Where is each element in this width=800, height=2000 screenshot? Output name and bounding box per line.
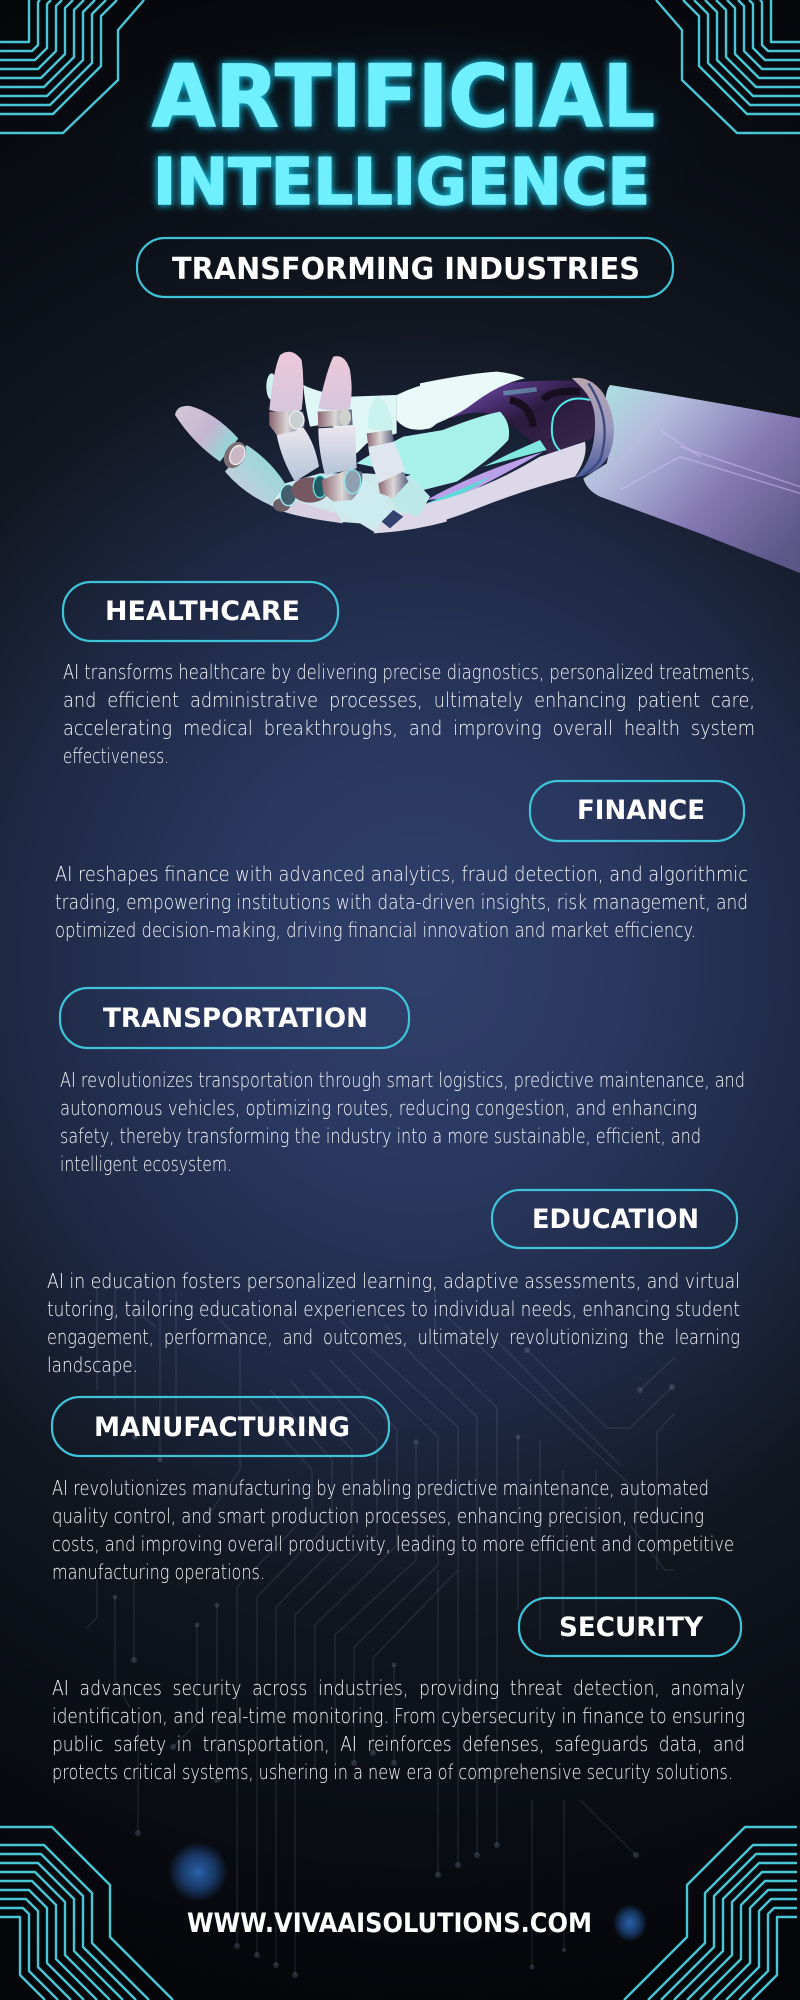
circuit corner: bottom left bbox=[0, 1827, 173, 2000]
title: ARTIFICIAL bbox=[152, 47, 655, 147]
section: finance bbox=[55, 781, 748, 942]
text: education: landscape. bbox=[47, 1353, 138, 1377]
text: manufacturing bbox=[52, 1476, 734, 1584]
finger one joint bbox=[219, 438, 251, 472]
finger two tip bbox=[269, 352, 303, 412]
text: security bbox=[52, 1676, 745, 1784]
forearm light streaks bbox=[620, 430, 800, 493]
subtitle pill: TRANSFORMING INDUSTRIES bbox=[172, 252, 640, 287]
section: healthcare bbox=[63, 582, 755, 768]
finger three segment bbox=[318, 426, 357, 475]
palm bottom bbox=[373, 508, 447, 533]
back of hand bbox=[420, 372, 525, 430]
knuckle two bbox=[292, 476, 328, 503]
section: security bbox=[52, 1598, 745, 1784]
text: transportation: intelligent ecosystem. bbox=[60, 1152, 232, 1176]
pill: healthcare bbox=[63, 582, 338, 641]
finger one segment bbox=[225, 445, 285, 505]
knuckle three bbox=[322, 470, 362, 502]
wrist tube bbox=[450, 381, 595, 455]
purple swoosh bbox=[427, 452, 543, 500]
pill: security: SECURITY bbox=[559, 1612, 703, 1643]
pill: transportation bbox=[60, 988, 409, 1048]
pill: manufacturing: MANUFACTURING bbox=[94, 1412, 350, 1443]
finger two segment bbox=[277, 427, 319, 482]
pill: finance: FINANCE bbox=[577, 795, 705, 826]
collar groove bbox=[583, 383, 605, 475]
pill: education bbox=[492, 1190, 737, 1248]
text: transportation bbox=[60, 1068, 745, 1176]
illustration: robotic hand bbox=[175, 352, 800, 573]
lower palm bbox=[410, 442, 586, 528]
lower finger base bbox=[330, 477, 393, 525]
forearm bbox=[583, 385, 800, 573]
glow: blue blob right bbox=[613, 1904, 647, 1942]
palm cyan bbox=[410, 412, 509, 493]
section: education bbox=[47, 1190, 740, 1377]
palm cyan bbox=[357, 430, 443, 480]
finger four segment bbox=[368, 442, 405, 483]
lower finger base right bbox=[383, 475, 430, 517]
finger one tip bbox=[175, 406, 238, 462]
dark joint bbox=[382, 510, 403, 528]
subtitle pill bbox=[137, 238, 673, 297]
fingers bbox=[175, 352, 447, 533]
finger two joint bbox=[269, 411, 305, 435]
title: INTELLIGENCE bbox=[153, 145, 650, 220]
circuit corner: top left bbox=[0, 0, 144, 133]
knuckle base silhouette bbox=[270, 473, 430, 533]
tube reflection bbox=[503, 389, 537, 393]
finger three tip bbox=[318, 356, 352, 410]
title bbox=[93, 25, 713, 245]
finger four joint bbox=[367, 430, 394, 447]
finger four tip bbox=[368, 397, 393, 431]
palm bottom segments bbox=[273, 500, 343, 523]
text: healthcare: effectiveness. bbox=[63, 744, 169, 768]
back of hand bbox=[397, 380, 443, 430]
text: manufacturing: manufacturing operations. bbox=[52, 1560, 265, 1584]
rear finger bbox=[266, 373, 277, 400]
knuckle one bbox=[273, 484, 296, 512]
pill: security bbox=[519, 1598, 741, 1656]
arm, wrist and palm bbox=[410, 372, 800, 573]
title: INTELLIGENCE bbox=[153, 145, 650, 220]
pill: manufacturing bbox=[52, 1397, 389, 1456]
inner palm bbox=[303, 385, 397, 453]
knuckle four bbox=[378, 472, 408, 498]
teal swoosh bbox=[427, 477, 490, 503]
pill: finance bbox=[530, 781, 744, 841]
teal ring bbox=[552, 399, 590, 451]
pill: education: EDUCATION bbox=[532, 1204, 699, 1235]
text: finance bbox=[55, 862, 748, 942]
footer website: WWW.VIVAAISOLUTIONS.COM bbox=[187, 1908, 592, 1939]
circuit corner: bottom right bbox=[624, 1827, 797, 2000]
section: manufacturing bbox=[52, 1397, 734, 1584]
pill: transportation: TRANSPORTATION bbox=[103, 1003, 368, 1034]
cyan stripe bbox=[483, 440, 547, 467]
wrist collar bbox=[572, 378, 614, 477]
section: transportation bbox=[60, 988, 745, 1176]
circuit board background pattern bbox=[87, 1285, 675, 1978]
title: ARTIFICIAL bbox=[152, 47, 655, 147]
glow: blue blob left bbox=[168, 1842, 228, 1902]
text: healthcare bbox=[63, 660, 755, 768]
finger three joint bbox=[318, 409, 353, 427]
text: education bbox=[47, 1269, 740, 1377]
tube dark bands bbox=[510, 391, 580, 427]
pill: healthcare: HEALTHCARE bbox=[105, 596, 300, 627]
circuit corner: top right bbox=[656, 0, 800, 133]
